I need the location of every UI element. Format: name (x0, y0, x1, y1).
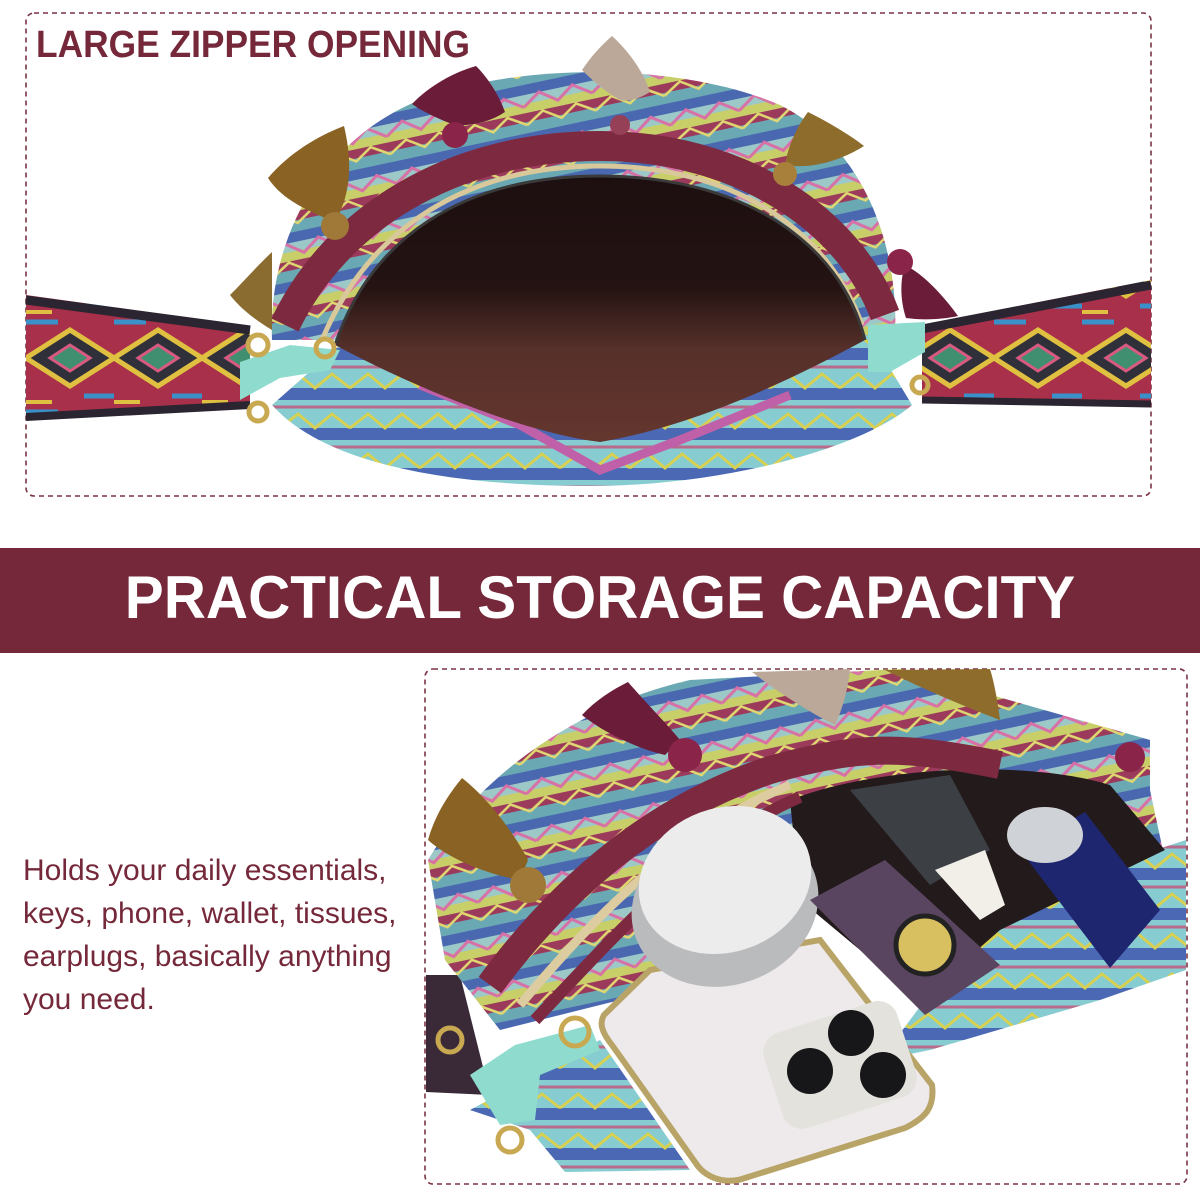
blue lipstick (1007, 807, 1160, 968)
panel: top dashed frame (26, 13, 1151, 496)
palette gold circle (896, 916, 954, 974)
dropper cap (935, 850, 1005, 920)
tassel: burgundy (582, 682, 702, 772)
phone (602, 940, 933, 1181)
bag lower right (880, 840, 1186, 1060)
text block: description: keys, phone, wallet, tissues, (23, 897, 397, 930)
bag lower front (272, 335, 912, 486)
teal tabs (240, 345, 340, 400)
compact mirror (608, 782, 842, 1013)
illustration: open bag top view (230, 36, 958, 486)
lower front pink zigzag (420, 385, 790, 470)
tassel: brown (428, 778, 546, 903)
gold hardware (248, 335, 928, 421)
bag upper body (428, 669, 1165, 1030)
gold clasp (438, 1018, 589, 1152)
strap stub (426, 975, 490, 1095)
strap: right (922, 280, 1151, 407)
tassel: burgundy right (1115, 742, 1145, 772)
illustration: filled bag with items (426, 669, 1186, 1181)
tassel: small brown (230, 252, 272, 330)
tassel: burgundy right (887, 249, 958, 319)
strap: left (26, 295, 250, 420)
tassel: beige (752, 669, 850, 725)
tassel: brown left (268, 126, 349, 240)
text block: description: earplugs, basically anything (23, 940, 392, 973)
dark bottle (850, 775, 990, 885)
cosmetic palette (810, 860, 1000, 1015)
panel: bottom dashed frame (425, 669, 1187, 1184)
text block: description: you need. (23, 983, 155, 1016)
text block: description: Holds your daily essentials, (23, 854, 387, 887)
zipper trim (285, 146, 885, 325)
tassel: beige (582, 36, 650, 135)
tassel: burgundy (412, 66, 505, 148)
tassel: brown right (885, 669, 1000, 720)
banner background (0, 548, 1200, 653)
tassel: brown right (773, 112, 864, 186)
phone camera module (758, 996, 922, 1134)
bag interior (335, 176, 865, 442)
bag lower left (470, 1040, 690, 1172)
text block: description (23, 854, 397, 1016)
teal tab (470, 1025, 600, 1125)
zipper trim (490, 751, 1000, 985)
dark interior (790, 769, 1165, 1000)
heading: large zipper opening: LARGE ZIPPER OPENING (36, 24, 470, 66)
bag upper body (272, 72, 895, 340)
banner title: PRACTICAL STORAGE CAPACITY (125, 564, 1075, 631)
